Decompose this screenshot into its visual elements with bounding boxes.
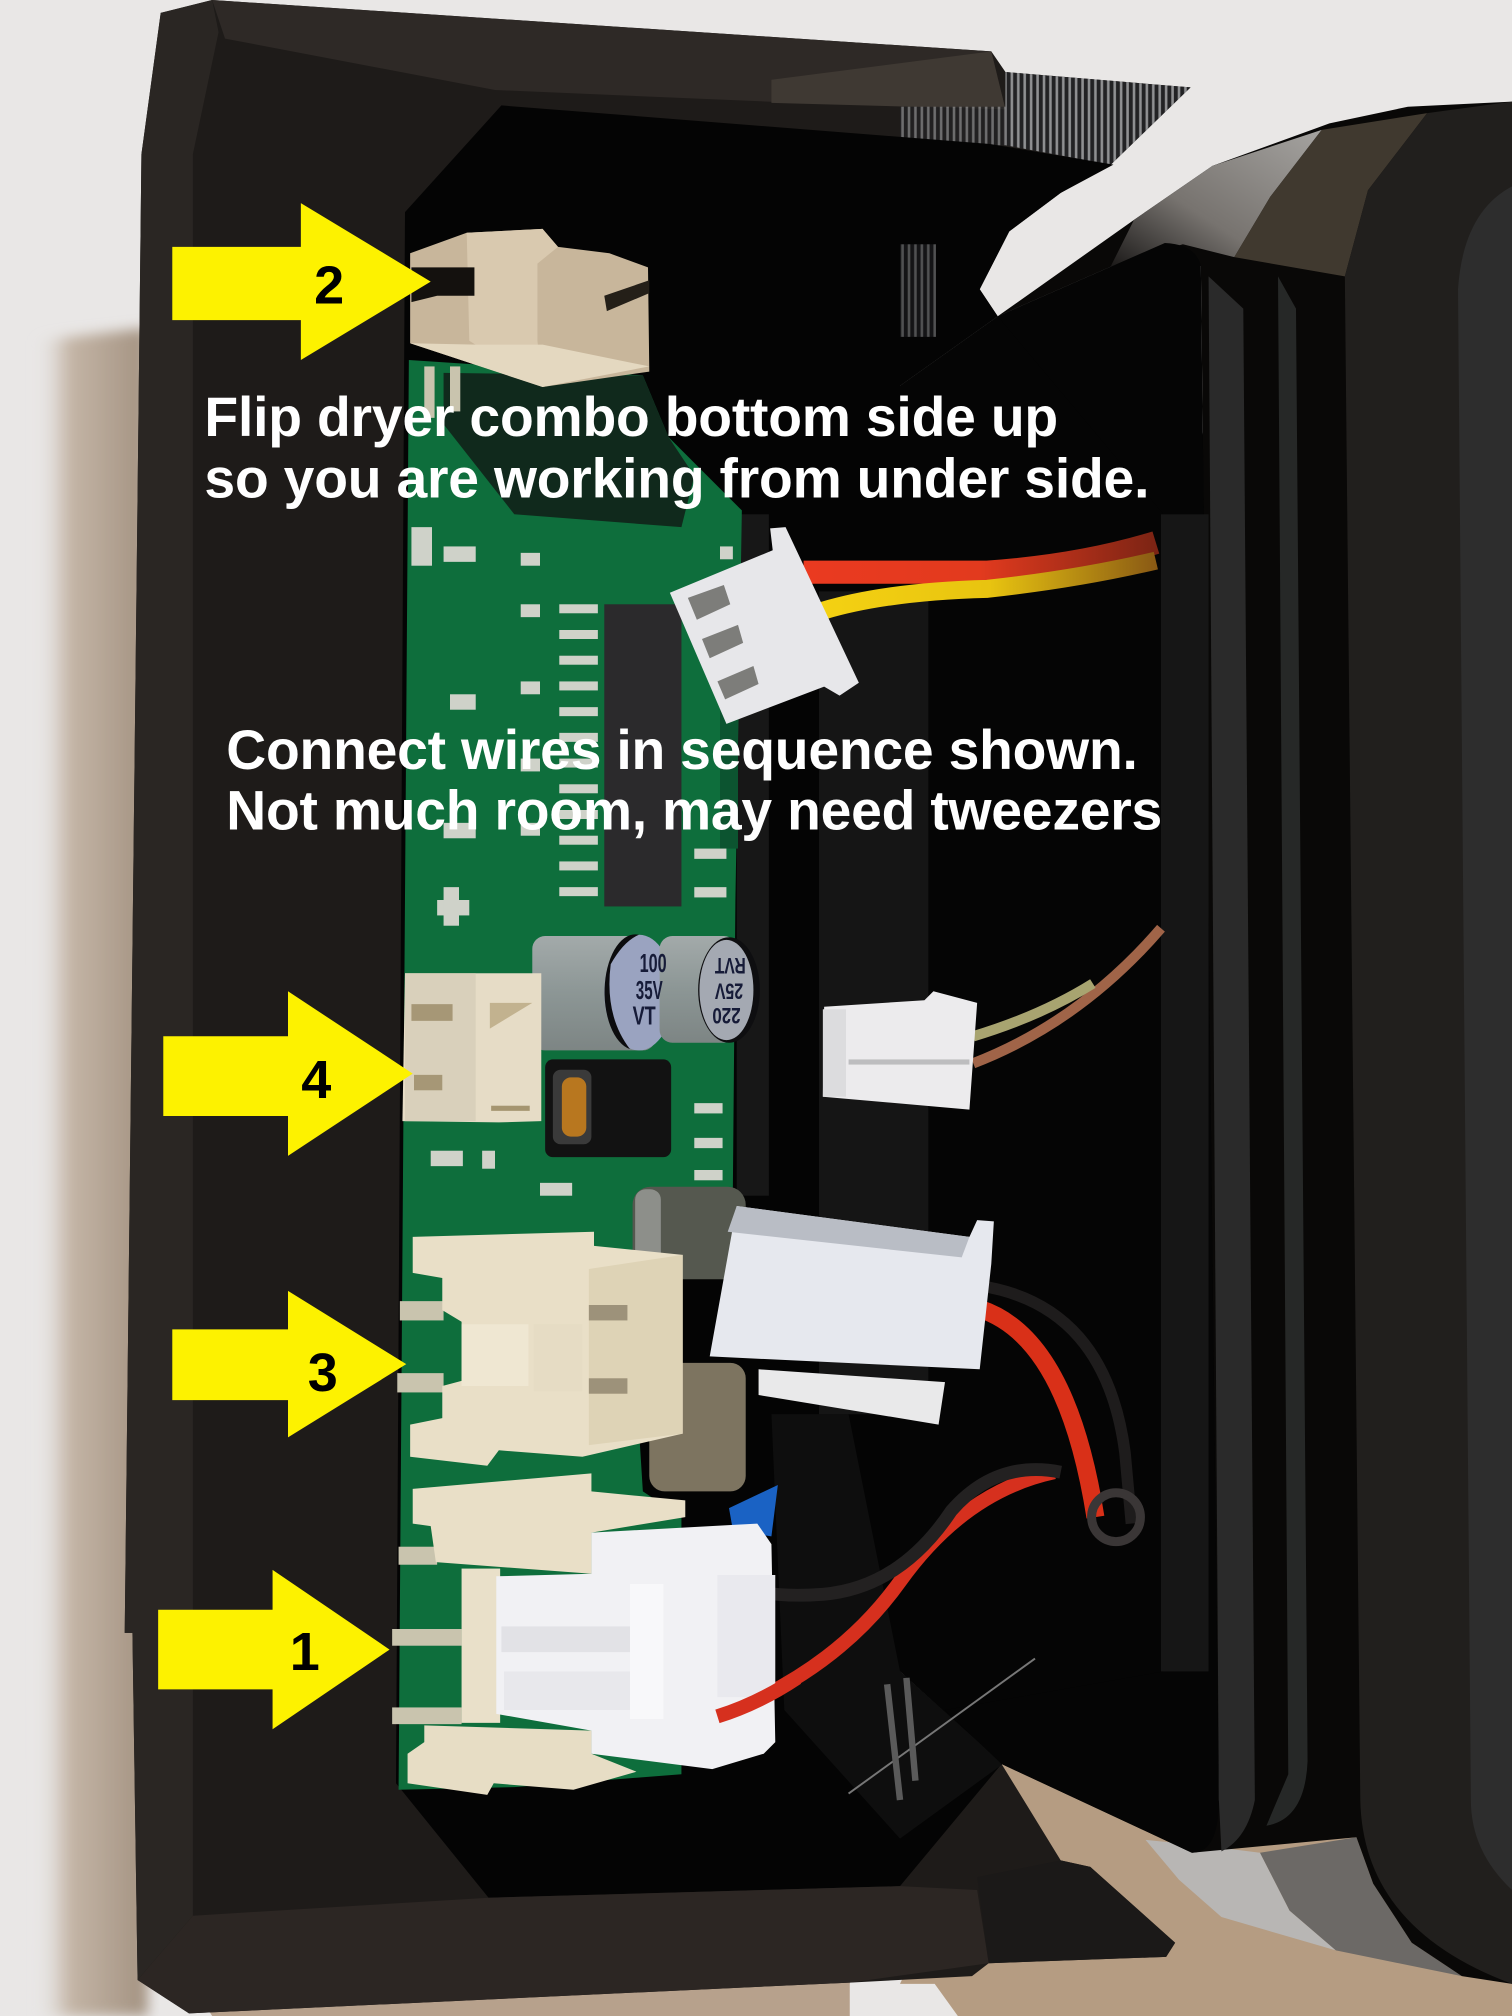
instruction text: connect wires: Connect wires in sequence shown.	[226, 719, 1138, 781]
cylinder base visible below fan	[1146, 1837, 1462, 1976]
loose white 3-pin plug with red and yellow wires	[670, 527, 1156, 724]
capacitor labels: 25V	[715, 979, 743, 1004]
yellow arrow 1	[158, 1570, 390, 1729]
instruction text: flip dryer combo: Flip dryer combo bottom side up	[204, 386, 1058, 448]
yellow arrow 1: 1	[290, 1622, 320, 1682]
interior dark strips	[737, 244, 1003, 1839]
instruction text: connect wires	[226, 719, 1162, 841]
yellow arrow 2	[172, 203, 431, 360]
connector 1 with white plug	[408, 1470, 1061, 1795]
connector 3 on board	[410, 1232, 683, 1466]
capacitor labels: 35V	[636, 977, 663, 1005]
hairs of stray filament	[849, 1659, 1035, 1800]
instruction text: flip dryer combo: so you are working from under side.	[204, 448, 1149, 510]
connector 4 on board	[402, 973, 541, 1122]
yellow arrow 3	[172, 1291, 406, 1437]
connector 2 on board	[410, 229, 649, 387]
yellow arrow 3: 3	[308, 1343, 338, 1403]
yellow arrow 2: 2	[314, 255, 344, 315]
loose white 2-pin plug with brown wire	[823, 928, 1161, 1110]
capacitor labels	[633, 950, 746, 1031]
yellow arrow 4: 4	[301, 1050, 331, 1110]
capacitors and inductor	[532, 934, 778, 1536]
capacitor labels: VT	[633, 1003, 656, 1031]
black printed enclosure	[125, 0, 1219, 2013]
instruction text: connect wires: Not much room, may need tweezers	[226, 779, 1162, 841]
capacitor labels: 100	[640, 950, 667, 978]
instruction text: flip dryer combo	[204, 386, 1149, 510]
yellow arrow 4	[163, 991, 413, 1156]
green circuit board	[392, 360, 742, 1790]
white plug with red and black wires	[710, 1206, 1140, 1542]
capacitor labels: 220	[712, 1003, 741, 1028]
capacitor labels: RVT	[714, 953, 746, 978]
dark fan housing on right	[945, 102, 1512, 1984]
